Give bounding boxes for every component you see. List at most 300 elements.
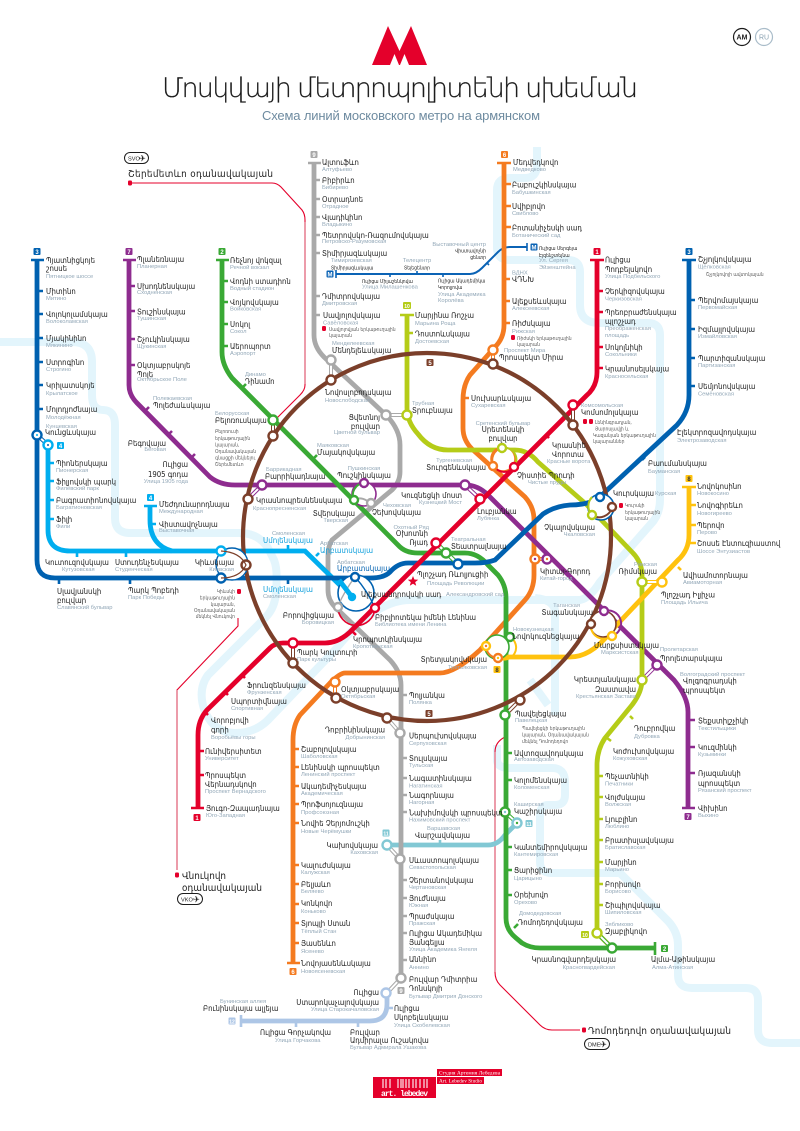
badge: line 9 north: 9 [312, 153, 316, 159]
station: Krasnoselskaya: Красносельская [605, 374, 648, 380]
badge: line 2 south [661, 945, 668, 953]
station: Altufyevo: Ալտուֆևո [322, 158, 359, 167]
station: Pionerskaya: Պիոներսկայա [56, 459, 108, 468]
station: Volgogradsky prospekt: Волгоградский проспект [680, 671, 745, 678]
badge: monorail west [326, 270, 334, 278]
station: Ulitsa Starokachalovskaya: Улица Старокачаловская [311, 1007, 379, 1013]
station: Krasnye vorota: Վորոտա [552, 450, 584, 459]
station: Sukharevskaya: Սուխարևսկայա [471, 394, 531, 403]
interchange: Kuznetsky most / Lubyanka [460, 480, 484, 504]
station: Mezhdunarodnaya: Մեժդունարոդնայա [159, 500, 230, 509]
station: Barrikadnaya: Баррикадная [266, 467, 302, 473]
language switch: RU [759, 34, 769, 42]
badge: line 4 branch [147, 494, 154, 502]
station: VDNKh: ВДНХ [512, 270, 528, 276]
station: Sretensky bulvar: բուլվար [488, 434, 518, 443]
station: Ulitsa Starokachalovskaya: Ստարոկաչալովսկայա [296, 998, 379, 1007]
station: Slavyansky bulvar: բուլվար [57, 596, 86, 605]
station: Zyablikovo: Зябликово [605, 922, 633, 928]
logo: Art. Lebedev Studio: art. lebedev [381, 1090, 428, 1099]
station: Shchukinskaya: Շչուկինսկայա [137, 335, 190, 344]
station: Smolenskaya 4: Смоленская [272, 531, 305, 537]
station: Krylatskoe: Крылатское [46, 391, 78, 397]
station: Avtozavodskaya: Ավտոզավոդսկայա [514, 749, 583, 758]
station: Babushkinskaya: Բաբուշկինսկայա [512, 180, 576, 190]
station: Taganskaya: Տագանսկայա [542, 608, 593, 617]
station labels: line 10 [412, 311, 676, 936]
station: Studencheskaya: Студенческая [115, 567, 153, 573]
station: Ploshchad Ilyicha: Պլոշչադ Իլյիչա [661, 590, 715, 600]
station: Prazhskaya: Պրաժսկայա [409, 912, 454, 921]
station: Chistye prudy: Чистые пруды [528, 480, 566, 486]
station: Mayakovskaya: Մայակովսկայա [317, 448, 375, 457]
station: Prazhskaya: Пражская [409, 921, 435, 927]
badge: line 6 south: 6 [291, 970, 295, 976]
badge: line 11 west: 11 [383, 832, 389, 838]
station: Novogireevo: Новогиреево [697, 511, 732, 517]
station: Bratislavskaya: Բրատիսլավսկայա [605, 836, 674, 845]
note: Komsomolskaya railway stations: Յարոսլավլի և [595, 426, 629, 432]
badge: line 2 north [218, 248, 226, 256]
station: Yasenevo: Ясенево [301, 949, 324, 955]
station: Okhotny Ryad: Օխոտնի [396, 529, 428, 538]
station labels: line 12 [203, 988, 450, 1051]
badge: line 7 north [126, 248, 132, 256]
station: Biblioteka imeni Lenina: Библиотека имени Ленина [375, 622, 447, 628]
station: Fili: Ֆիլի [56, 515, 72, 524]
station: Oktyabrskaya: Օկտյաբրսկայա [341, 685, 399, 694]
station: Aviamotornaya: Ավիամոտորնայա [683, 571, 748, 580]
station: Kozhukhovskaya: Կոժուխովսկայա [613, 747, 674, 756]
station: Tsaritsyno: Ցարիցինո [514, 866, 552, 875]
station: Ulitsa Skobelevskaya: Սկոբելևսկայա [394, 1013, 448, 1022]
station: Aeroport: Аэропорт [230, 351, 256, 357]
station: Krasnogvardeyskaya: Красногвардейская [563, 964, 615, 971]
station: Komsomolskaya: Կոմսոմոլսկայա [581, 408, 638, 417]
station: Cherkizovskaya: Չերկիզովսկայա [605, 287, 665, 296]
station: Zyablikovo: Զյաբլիկովո [605, 927, 647, 936]
station: Ulitsa Akademika Korolyova: Կորոլյովա [438, 285, 462, 291]
station: Vystavochnaya: Վիստավոչնայա [159, 520, 218, 529]
station: Dobryninskaya: Добрынинская [346, 735, 385, 741]
station: Proletarskaya: Пролетарская [660, 647, 698, 653]
station: Yasenevo: Յասենևո [301, 939, 336, 948]
station: Mezhdunarodnaya: Международная [159, 509, 203, 515]
interchange: Proletarskaya / Krestyanskaya Zastava [638, 660, 662, 684]
station: Vystavochny tsentr: Վիստավոչնի [455, 248, 486, 254]
station: Shosse Entuziastov: Шоссе Энтузиастов [697, 549, 750, 555]
interchange: Barrikadnaya / Krasnopresnenskaya [244, 480, 266, 504]
station: Polezhaevskaya: Полежаевская [153, 396, 192, 402]
interchange: Kuntsevskaya [32, 430, 52, 450]
station: Altufyevo: Алтуфьево [322, 167, 352, 173]
station: Chkalovskaya: Չկալովսկայա [544, 523, 595, 532]
badge: line 1 south: 1 [195, 816, 199, 822]
station: Maryino: Մարյինո [605, 858, 637, 867]
interchange: Oktyabrskaya [330, 678, 340, 702]
station: Krasnoselskaya: Կրասնոսելսկայա [605, 364, 669, 374]
station: Prospekt Vernadskogo: Проспект Вернадского [205, 789, 266, 795]
station: Volgogradsky prospekt: Վոլգոգրադսկի [683, 676, 737, 686]
station: Tverskaya: Տվերսկայա [313, 509, 355, 518]
station: Pyatnitskoe shosse: շոսսե [46, 264, 67, 273]
station: Petrovsko-Razumovskaya: Պետրովսկո-Ռազումովսկայա [322, 231, 429, 240]
note: Kievsky railway station: երկաթուղային [200, 596, 235, 602]
station: Shabolovskaya: Шаболовская [301, 754, 338, 760]
star: Red Square [408, 576, 418, 586]
station: Pechatniki: Печатники [605, 782, 633, 788]
station: Kuntsevskaya: Кунцевская [46, 424, 77, 430]
station: Baumanskaya: Բաումանսկայա [648, 459, 707, 468]
station labels: line 7 [128, 255, 752, 819]
station: Proletarskaya: Պրոլետարսկայա [660, 654, 723, 663]
station: Chertanovskaya: Չերտանովսկայա [409, 876, 473, 885]
station: Strogino: Ստրոգինո [46, 358, 84, 367]
station: Universitet: Ունիվերսիտետ [205, 747, 262, 756]
line 5 circle [243, 353, 611, 721]
station: Telecentr: Телецентр [403, 258, 431, 264]
note: Kursky railway station: Կուրսկի [625, 503, 645, 509]
station: Partizanskaya: Партизанская [698, 363, 735, 369]
station: Prospekt Vernadskogo: Վերնադսկովո [205, 780, 257, 789]
note: Belorussky railway station: Բելոռուսի [215, 429, 239, 435]
station: Pyatnitskoe shosse: Пятницкое шоссе [46, 274, 93, 280]
station: Kitay-Gorod: Китай-город [540, 575, 573, 582]
station: Sretensky bulvar: Сретенский бульвар [476, 420, 530, 427]
interchange: Paveletskaya [500, 696, 524, 720]
station: Sviblovo: Սվիբլովո [512, 202, 545, 211]
station labels: line 5 [194, 496, 385, 741]
line 2 route [216, 260, 655, 955]
station: Krestyanskaya Zastava: Զաստավա [595, 685, 636, 694]
note: Shchyolkovo bus station: Շչյոլկովոյի ավտոկայան [706, 272, 764, 278]
interchange: Tsvetnoy / Trubnaya [382, 410, 412, 420]
station: Perovo: Պերովո [697, 521, 724, 530]
station: Alma-Atinskaya: Ալմա-Աթինսկայա [651, 955, 715, 964]
badge: line 9 south [398, 987, 404, 995]
interchange: Mendeleevskaya / Novoslobodskaya [326, 356, 336, 384]
station: Semyonovskaya: Սեմյոնովսկայա [698, 382, 755, 391]
station: Yuzhnaya: Յուժնայա [409, 894, 446, 903]
station: Ulitsa Milashenkova: Ուլիցա Միլաշենկովա [362, 279, 413, 285]
station: Planernaya: Պլանեռնայա [137, 255, 184, 264]
station: Park Kultury: Парк культуры [297, 657, 336, 663]
line 1 route [191, 260, 604, 808]
station: Tushinskaya: Тушинская [137, 316, 166, 322]
station: Bulvar Dmitriya Donskogo: Դոնսկոյի [409, 984, 442, 993]
station: Molodyozhnaya: Молодёжная [46, 415, 81, 421]
station: Smolenskaya 3: Սմոլենսկայա [263, 585, 313, 594]
interchange: Park Kultury [288, 638, 298, 668]
station: Yugo-Zapadnaya: Յուգո-Զապադնայա [206, 804, 280, 813]
note: Rizhsky railway station: Ռիժսկի երկաթուղային [517, 336, 572, 342]
station: Vorobyovy gory: Воробьёвы горы [211, 735, 256, 741]
station: Ulitsa 1905 goda: Улица 1905 года [144, 479, 189, 485]
station: Pionerskaya: Пионерская [56, 468, 88, 474]
station: Ulitsa Podbelskogo: Улица Подбельского [605, 274, 660, 280]
station: Nagornaya: Նագորնայա [409, 791, 454, 800]
interchange: Kievskaya [216, 546, 250, 582]
badge: line 11 west [382, 830, 390, 838]
station: Oktyabrskoe Pole: Պոլե [137, 370, 153, 379]
station: Tulskaya: Тульская [409, 763, 433, 769]
station: Ulitsa Sergeya Eisensteina: Էյզենշտեյնա [539, 253, 570, 259]
station: Botanichesky sad: Բոտանիչեսկի սադ [512, 224, 582, 232]
station: Varshavskaya: Վարշավսկայա [415, 831, 470, 840]
language switch: AM [737, 34, 748, 42]
station: Ulitsa Sergeya Eisensteina: Ուլիցա Սերգեյա [539, 246, 577, 252]
station: Rechnoy vokzal: Ռեչնոյ վոկզալ [230, 256, 282, 265]
station: Shchukinskaya: Щукинская [137, 344, 166, 350]
station: Mitino: Միտինո [46, 287, 76, 296]
station: Ploshchad Ilyicha: Площадь Ильича [661, 600, 709, 606]
station: Konkovo: Կոնկովո [301, 899, 332, 908]
interchange: Kurskaya hub [588, 493, 616, 520]
station: Kashirskaya: Каширская [514, 802, 544, 808]
station: Profsoyuznaya: Профсоюзная [301, 810, 339, 816]
station: Kaluzhskaya: Կալուժսկայա [301, 861, 351, 870]
station: Bulvar Admirala Ushakova: Բուլվար [350, 1028, 380, 1037]
station: Mayakovskaya: Маяковская [317, 443, 349, 449]
station: Krasnye vorota: Красные ворота [547, 459, 591, 465]
airport: Vnukovo: VKO [181, 898, 193, 904]
station: Vorobyovy gory: Վորոբյովի [211, 716, 249, 725]
station: Bulvar Dmitriya Donskogo: Бульвар Дмитрия Донского [409, 994, 482, 1000]
station: Buninskaya alleya: Բունինսկայա ալլեյա [203, 1004, 278, 1013]
station: Preobrazhenskaya ploshchad: Պրեոբրաժենսկայա [605, 308, 677, 317]
interchange: Rimskaya / Ploshchad Ilyicha [638, 578, 666, 586]
interchange: Kashirskaya [500, 808, 522, 828]
station: Nagatinskaya: Նագատինսկայա [409, 774, 472, 783]
interchange: Arbat hub [334, 573, 379, 626]
station: Smolenskaya 3: Смоленская [263, 594, 296, 600]
station: Sevastopolskaya: Սևաստոպոլսկայա [409, 856, 479, 865]
line 9 route [308, 163, 407, 978]
station: Sviblovo: Свиблово [512, 211, 538, 217]
badge: monorail east [530, 244, 538, 252]
station: Dinamo: Դինամո [245, 377, 274, 386]
station: Alexandrovsky sad: Александровский сад [446, 591, 505, 598]
station: Otradnoe: Օտրադնոե [322, 195, 363, 204]
line 10 route [400, 315, 642, 948]
station: Slavyansky bulvar: Славянский бульвар [57, 604, 112, 611]
station: Avtozavodskaya: Автозаводская [514, 757, 554, 763]
badge: line 10 north [403, 302, 411, 310]
station: Borisovo: Բորիսովո [605, 880, 641, 889]
station: Tretyakovskaya: Տրետյակովսկայա [421, 655, 487, 664]
station: Tsvetnoy bulvar: Цветной бульвар [334, 429, 380, 436]
station: Nagatinskaya: Нагатинская [409, 784, 443, 790]
station: Oktyabrskoe Pole: Октябрьское Поле [137, 377, 187, 383]
station: Volokolamskaya: Վոլոկոլամսկայա [46, 310, 108, 319]
station: Pervomayskaya: Պերվոմայսկայա [698, 296, 758, 305]
badge: line 8 center: 8 [495, 668, 499, 674]
station: Lubyanka: Լուբյանկա [477, 507, 517, 516]
line 11 route [387, 823, 517, 845]
station: Belyaevo: Беляево [301, 889, 324, 895]
station: Rimskaya: Римская [634, 562, 657, 568]
station: Prospekt Vernadskogo: Պրոսպեկտ [205, 771, 246, 780]
station: Teatralnaya: Театральная [451, 537, 486, 543]
station: Skhodnenskaya: Սխոդնենսկայա [137, 282, 195, 291]
interchange: Prospekt Mira [488, 346, 498, 368]
line 6 route [287, 163, 534, 963]
station: Ulitsa Milashenkova: Улица Милашенкова [362, 284, 419, 290]
badge: line 8 east: 8 [687, 477, 691, 483]
station: Kolomenskaya: Կոլոմենսկայա [514, 776, 567, 785]
station: Volgogradsky prospekt: պրոսպեկտ [683, 686, 725, 695]
note: Belorussky railway station: գնացքի մեկնելու [215, 456, 257, 462]
badge: line 9 south: 9 [399, 989, 403, 995]
station: Polezhaevskaya: Պոլեժաևսկայա [153, 401, 210, 410]
station: Alekseevskaya: Ալեքսեևսկայա [512, 297, 566, 306]
station: Dmitrovskaya: Дмитровская [322, 301, 357, 307]
station: Paveletskaya: Պավելեցկայա [515, 710, 566, 718]
station: Shipilovskaya: Շիպիլովսկայա [605, 901, 661, 910]
station: Vorobyovy gory: գորի [211, 726, 229, 734]
interchange: Novokuznetskaya hub [482, 633, 516, 662]
airport: Vnukovo: ✈ [193, 896, 200, 906]
station: Yuzhnaya: Южная [409, 903, 428, 909]
station: Volzhskaya: Волжская [605, 802, 631, 808]
station labels: line 13 monorail [331, 241, 577, 304]
station: Volzhskaya: Վոլժսկայա [605, 793, 645, 802]
station: Tekstilshchiki: Текстильщики [698, 726, 736, 732]
station: Filyovsky park: Филёвский парк [56, 485, 99, 492]
note: Komsomolskaya railway stations: Կազանյան երկաթուղային [593, 433, 656, 439]
station: Oktyabrskoe Pole: Օկտյաբրսկոյե [137, 361, 190, 370]
station: Kashirskaya: Կաշիրսկայա [514, 807, 562, 816]
note: Savyolovsky railway station: Սավյոլովյան երկաթուղային [329, 327, 396, 333]
badge: line 4: 4 [59, 444, 63, 450]
station: Pervomayskaya: Первомайская [698, 304, 737, 311]
station: Tsvetnoy bulvar: Ցվետնոյ [349, 413, 380, 422]
station: Kozhukhovskaya: Кожуховская [613, 756, 647, 762]
station: Barrikadnaya: Բարրիկադնայա [265, 472, 325, 481]
station: Shipilovskaya: Шипиловская [605, 910, 642, 916]
station labels: line 9 [283, 158, 503, 1000]
badge: line 12: 12 [229, 1020, 235, 1026]
station: Frunzenskaya: Фрунзенская [247, 690, 282, 696]
station: Prospekt Mira: Պրոսպեկտ Միրա [499, 353, 563, 362]
station: Tverskaya: Тверская [323, 518, 348, 524]
station: Krylatskoe: Կրիլատսկոյե [46, 381, 95, 390]
station: Novoslobodskaya: Новослободская [325, 398, 370, 404]
station: Kakhovskaya: Կախովսկայա [327, 841, 378, 850]
station: Profsoyuznaya: Պրոֆսոյուզնայա [301, 800, 363, 809]
station: Vykhino: Վիխինո [698, 804, 728, 813]
station: Paveletskaya: Павелецкая [515, 718, 547, 724]
station: Dinamo: Динамо [245, 372, 266, 378]
station: Ulitsa Akademika Yangelya: Յանգելյա [409, 938, 445, 947]
station: Novokuznetskaya: Новокузнецкая [513, 627, 554, 633]
station: Novoyasenevskaya: Նովոյասենևսկայա [301, 959, 371, 968]
badge: line 8 east [686, 475, 692, 483]
station: Ulitsa Akademika Yangelya: Ուլիցա Ակադեմիկա [409, 929, 482, 938]
interchange: Zyablikovo / Krasnogvardeyskaya [592, 928, 616, 952]
logo: Art. Lebedev Studio [373, 1069, 502, 1099]
interchange: Kakhovskaya / Sevastopolskaya [382, 840, 404, 864]
station labels: line 2 [215, 256, 715, 971]
interchange: Taganskaya hub [587, 607, 621, 640]
station: Kolomenskaya: Коломенская [514, 785, 549, 791]
note: Kievsky railway station: Օդանավակայան [194, 608, 235, 614]
station: Bulvar Admirala Ushakova: Ադմիրալա Ուշակովա [350, 1036, 429, 1045]
station: Chekhovskaya: Чеховская [383, 503, 411, 509]
line 3 route [31, 260, 696, 584]
station: Preobrazhenskaya ploshchad: պլոշչադ [605, 317, 636, 326]
airport: Sheremetyevo [124, 152, 273, 186]
station: Okhotny Ryad: Охотный Ряд [394, 524, 430, 531]
station: Maryino: Марьино [605, 867, 629, 873]
station: Ulitsa Akademika Korolyova: Королёва [438, 298, 465, 304]
station labels: line 4 [45, 459, 505, 599]
note: Komsomolskaya railway stations [583, 419, 656, 445]
line number badges [34, 151, 692, 1026]
station: Alekseevskaya: Алексеевская [512, 306, 549, 312]
station: Polyanka: Պոլյանկա [409, 691, 445, 700]
station: Lyublino: Լյուբլինո [605, 815, 637, 824]
station: Arbatskaya 4: Арбатская [320, 541, 348, 547]
station: Biblioteka imeni Lenina: Բիբլիոտեկա իմենի Լենինա [375, 613, 476, 622]
station: Rizhskaya: Рижская [512, 329, 535, 335]
station: Leninsky prospekt: Ленинский проспект [301, 771, 356, 778]
station: Pyatnitskoe shosse: Պյատնիցկոյե [46, 256, 95, 265]
station: Turgenevskaya: Տուրգենևսկայա [426, 463, 486, 472]
badge: line 9 north [310, 151, 318, 159]
station: Izmaylovskaya: Измайловская [698, 333, 737, 340]
language switch [734, 28, 772, 46]
badge: line 3 east: 3 [687, 250, 691, 256]
line 8 route [498, 487, 696, 657]
station: Komsomolskaya: Комсомольская [581, 403, 623, 409]
note: Belorussky railway station: երկաթուղային [215, 436, 250, 442]
station: Taganskaya: Таганская [553, 603, 580, 609]
station: Bulvar Admirala Ushakova: Бульвар Адмирала Ушакова [350, 1045, 427, 1051]
station: Arbatskaya 3: Арбатская [337, 560, 365, 566]
station: Okhotny Ryad: Ռյադ [409, 538, 428, 547]
station: Shchyolkovskaya: Щёлковская [698, 264, 731, 270]
station: Elektrozavodskaya: Электрозаводская [677, 438, 727, 444]
station: Medvedkovo: Медведково [513, 167, 546, 173]
station: Novokuznetskaya: Նովոկուզնեցկայա [512, 632, 579, 641]
station: Mendeleevskaya: Մենդելեևսկայա [332, 346, 391, 355]
badge: line 10 north: 10 [404, 304, 410, 310]
interchange: Kitay-Gorod [530, 554, 552, 564]
station: Dostoevskaya: Դոստոևսկայա [415, 330, 470, 338]
station: Tekstilshchiki: Տեքստիլշչիկի [698, 716, 748, 726]
station: Ryazansky prospekt: Ռյազանսկի [698, 769, 741, 778]
station: Dostoevskaya: Достоевская [415, 339, 449, 345]
station: Kantemirovskaya: Кантемировская [514, 852, 558, 858]
station: Borovitskaya: Боровицкая [302, 620, 334, 626]
station: Annino: Աննինո [409, 955, 436, 964]
station: Trubnaya: Трубная [412, 401, 434, 407]
station: Kutuzovskaya: Կուտուզովսկայա [45, 558, 109, 567]
station: Sportivnaya: Спортивная [231, 706, 263, 712]
badge: line 1 north [594, 248, 600, 256]
station: Vodny stadion: Վոդնի ստադիոն [230, 277, 291, 286]
station: Strogino: Строгино [46, 367, 71, 373]
station: Kantemirovskaya: Կանտեմիրովսկայա [514, 843, 587, 852]
station: Bagrationovskaya: Багратионовская [56, 505, 102, 511]
airport: Sheremetyevo: Շերեմետևո օդանավակայան [128, 169, 273, 180]
station: Voykovskaya: Войковская [230, 306, 261, 312]
station: Preobrazhenskaya ploshchad: площадь [605, 333, 629, 339]
station: Frunzenskaya: Ֆրունզենսկայա [247, 681, 306, 690]
station: Kuzminki: Кузьминки [698, 752, 726, 758]
badge: line 7 south: 7 [686, 815, 690, 821]
